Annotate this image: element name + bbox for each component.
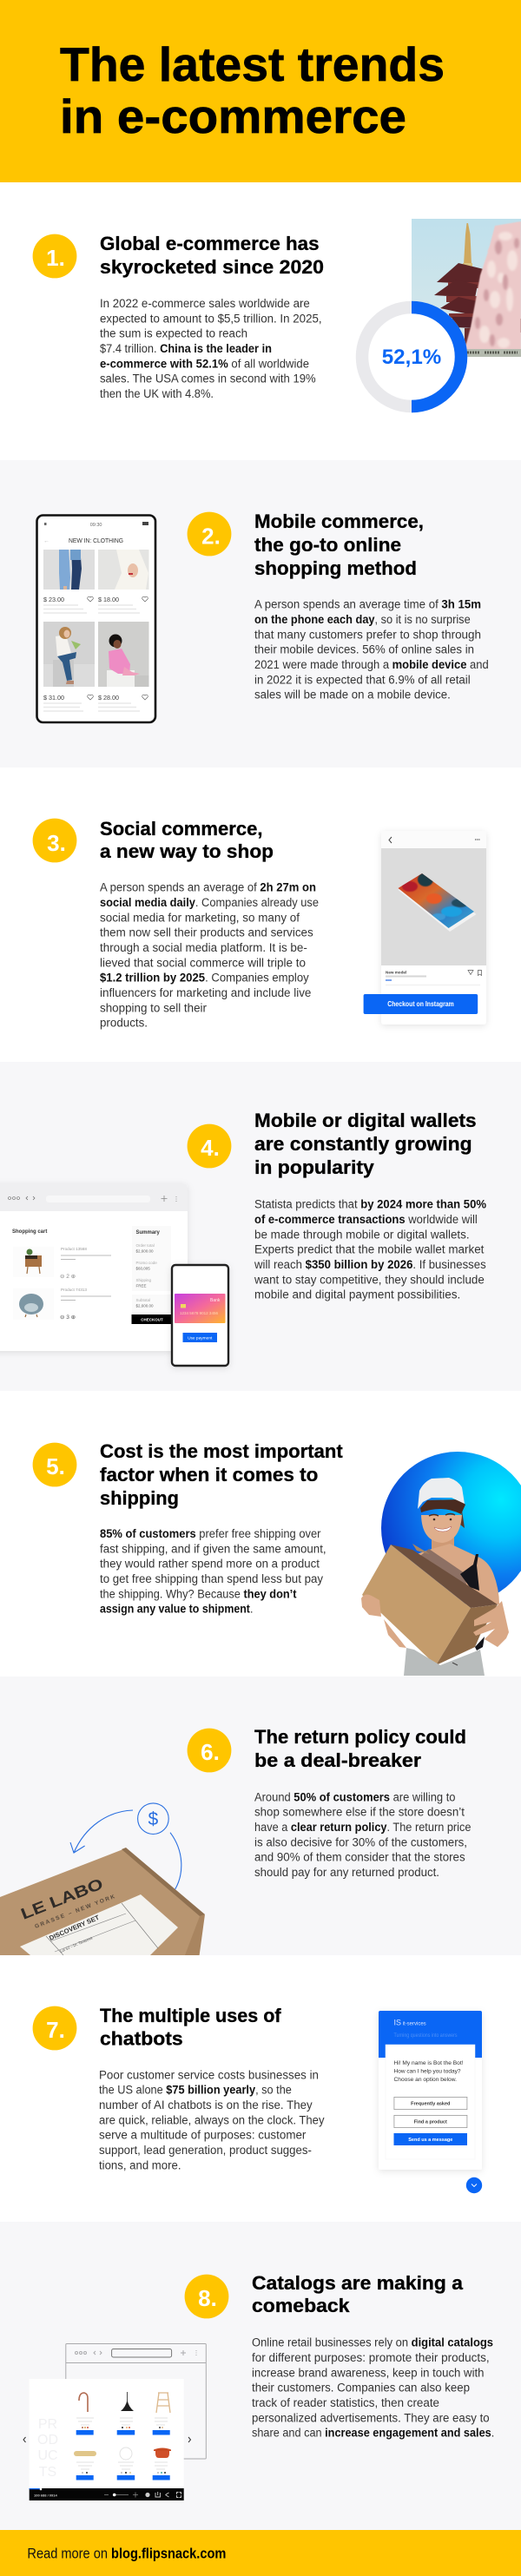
product photo: woman on cube <box>43 622 95 687</box>
badge 4 <box>188 1124 231 1168</box>
option buttons: Send us a message <box>408 2138 452 2143</box>
heading 1 <box>100 233 324 278</box>
body text 3: influencers for marketing and include live <box>100 986 311 999</box>
body text 4: will reach $350 billion by 2026. If businesses <box>254 1258 486 1271</box>
body text 4: Experts predict that the mobile wallet market <box>254 1243 485 1256</box>
donut chart 52,1% <box>362 307 461 406</box>
panel: section 3 social commerce <box>33 818 486 1030</box>
body text 8: track of reader statistics, then create <box>252 2396 439 2409</box>
heading 8: Catalogs are making a <box>252 2272 464 2294</box>
catalog products <box>74 2392 171 2460</box>
product details 1: ⊖ 2 ⊕ <box>60 1274 76 1280</box>
body text 1: then the UK with 4.8%. <box>100 387 214 400</box>
body text 4: want to stay competitive, they should include <box>254 1273 485 1286</box>
browser outline <box>66 2344 206 2459</box>
badge 7: 7. <box>46 2017 65 2043</box>
panel: section 5 shipping cost <box>33 1440 521 1676</box>
badge 3: 3. <box>47 830 66 856</box>
heading 6: be a deal-breaker <box>254 1749 421 1771</box>
refund cycle arrows and dollar icon: $ <box>148 1809 159 1829</box>
body text 8: share and can increase engagement and sales. <box>252 2427 494 2440</box>
badge 6: 6. <box>201 1739 220 1765</box>
chatbot widget: Turning questions into answers <box>394 2033 457 2039</box>
phone with payment card: Use payment <box>188 1335 213 1341</box>
heading 6 <box>254 1726 466 1771</box>
heading 3: a new way to shop <box>100 840 274 862</box>
ground strip <box>465 349 521 357</box>
product prices row 2 <box>43 694 148 711</box>
heading 4: Mobile or digital wallets <box>254 1110 477 1131</box>
scroll button <box>466 2177 482 2193</box>
order summary: Shipping <box>135 1278 152 1282</box>
body text 6: have a clear return policy. The return price <box>254 1821 471 1834</box>
body text 3: social media for marketing, so many of <box>100 911 300 924</box>
heading 7: The multiple uses of <box>100 2005 281 2026</box>
heading 1: skyrocketed since 2020 <box>100 256 324 278</box>
body text 8: increase brand awareness, keep in touch with <box>252 2366 485 2379</box>
body text 5: to get free shipping than spend less but pay <box>100 1572 323 1585</box>
body text 7: are quick, reliable, always on the clock. They <box>99 2113 325 2126</box>
phone mockup with clothing shop <box>36 516 155 722</box>
box brand text: GRASSE – NEW YORK <box>34 1894 115 1930</box>
heading 5: shipping <box>100 1487 179 1509</box>
body text 3: A person spends an average of 2h 27m on <box>100 881 316 894</box>
title <box>60 37 445 143</box>
body text 7: Poor customer service costs businesses in <box>99 2068 319 2081</box>
heading 2: Mobile commerce, <box>254 511 424 532</box>
photo: pagoda with cherry blossoms <box>412 219 521 357</box>
product photo: white hooded woman <box>98 550 149 590</box>
heading 2: shopping method <box>254 557 417 579</box>
catalog side title <box>37 2417 58 2480</box>
body text 4: of e-commerce transactions worldwide will <box>254 1213 478 1226</box>
body text 8: for different purposes: promote their products, <box>252 2351 490 2364</box>
box brand text: Lot 52 – Dr. Tarasova <box>59 1935 93 1953</box>
product photo: denim couple <box>43 547 95 590</box>
body text 3: through a social media platform. It is be- <box>100 941 307 954</box>
heading 7: chatbots <box>100 2028 183 2050</box>
catalog side title: PR <box>38 2417 57 2432</box>
body text 2 <box>254 598 489 702</box>
product: armchair <box>13 1288 54 1320</box>
body text 8: Online retail businesses rely on digital catalogs <box>252 2336 493 2349</box>
badge 2 <box>188 512 231 556</box>
body text 3 <box>100 881 319 1030</box>
body text 6: and 90% of them consider that the stores <box>254 1851 465 1864</box>
phone mockup with clothing shop: 09:30 <box>90 523 102 528</box>
top and jeans <box>404 1637 485 1676</box>
body text 4 <box>254 1198 486 1301</box>
donut chart 52,1%: 52,1% <box>382 346 441 369</box>
panel: section 1 global e-commerce <box>33 219 521 406</box>
body text 5 <box>100 1527 326 1616</box>
body text 5: they would rather spend more on a product <box>100 1558 320 1571</box>
product details 2: ⊖ 3 ⊕ <box>60 1314 76 1321</box>
heading 6: The return policy could <box>254 1726 466 1748</box>
body text 2: in 2022 it is expected that 6.9% of all retail <box>254 673 471 686</box>
product details 2: Product 74313 <box>61 1288 87 1292</box>
badge 5 <box>33 1443 76 1486</box>
order summary <box>132 1226 172 1324</box>
box brand text: LE LABO <box>18 1874 106 1923</box>
body text 6: is also decisive for 30% of the customers, <box>254 1835 467 1848</box>
panel: section 8 catalogs <box>0 2222 521 2530</box>
order summary: CHECKOUT <box>141 1318 163 1321</box>
browser shopping cart mockup: Shopping cart <box>12 1229 47 1235</box>
heading 4 <box>254 1110 477 1178</box>
phone with payment card <box>172 1265 228 1366</box>
body text 5: the shipping. Why? Because they don’t <box>100 1587 297 1600</box>
heading 2: the go-to online <box>254 534 401 556</box>
checkout button: Checkout on Instagram <box>387 999 454 1008</box>
body text 1: In 2022 e-commerce sales worldwide are <box>100 297 310 310</box>
body text 2: A person spends an average time of 3h 15m <box>254 598 481 611</box>
body text 3: them now sell their products and services <box>100 926 313 939</box>
catalog product captions <box>76 2418 168 2469</box>
body text 6: shop somewhere else if the store doesn’t <box>254 1806 465 1819</box>
body text 1: sales. The USA comes in second with 19% <box>100 372 316 385</box>
body text 4: mobile and digital payment possibilities. <box>254 1288 460 1301</box>
badge 1 <box>33 234 76 278</box>
body text 1: e-commerce with 52.1% of all worldwide <box>100 357 309 370</box>
order summary: Summary <box>135 1230 161 1235</box>
arms and hands <box>361 1595 509 1648</box>
body text 6 <box>254 1790 471 1879</box>
body text 6: should pay for any returned product. <box>254 1866 439 1879</box>
catalog toolbar <box>30 2488 184 2500</box>
catalog side title: UC <box>37 2448 58 2463</box>
body text 3: social media daily. Companies already use <box>100 896 319 909</box>
body text 2: that many customers prefer to shop through <box>254 628 481 641</box>
catalog side title: OD <box>37 2433 58 2448</box>
body text 6: Around 50% of customers are willing to <box>254 1790 455 1803</box>
body text 4: be made through mobile or digital wallets. <box>254 1228 470 1241</box>
catalog colour swatches <box>82 2427 166 2474</box>
body text 8: their customers. Companies can also keep <box>252 2382 470 2395</box>
box <box>362 1544 498 1665</box>
body text 1: the sum is expected to reach <box>100 327 247 340</box>
badge 5: 5. <box>46 1453 65 1479</box>
blossom tree <box>465 221 521 356</box>
social post mockup <box>364 831 486 1024</box>
panel: section 6 return policy <box>0 1728 471 1955</box>
refund cycle arrows and dollar icon <box>70 1803 181 1889</box>
product details 1 <box>60 1247 111 1280</box>
cap <box>418 1478 465 1509</box>
product prices row 1: $ 23.00 <box>43 596 64 603</box>
title: The latest trends <box>60 37 445 91</box>
box brand text: DISCOVERY SET <box>48 1914 101 1942</box>
bot greeting <box>394 2060 464 2083</box>
body text 1: expected to amount to $5,5 trillion. In 2025, <box>100 312 322 325</box>
phone mockup with clothing shop: NEW IN: CLOTHING <box>69 537 123 544</box>
order summary: $60,005 <box>135 1266 150 1271</box>
body text 7 <box>99 2068 325 2171</box>
photo: smiling woman holding box on blue circle <box>361 1452 521 1676</box>
body text 2: their mobile devices. 56% of online sales in <box>254 643 474 656</box>
product photo: woman in pink <box>98 622 149 687</box>
body text 2: on the phone each day, so it is no surprise <box>254 613 471 626</box>
body text 7: tions, and more. <box>99 2158 181 2171</box>
heading 7 <box>100 2005 281 2050</box>
body text 7: number of AI chatbots is on the rise. They <box>99 2098 313 2112</box>
panel: section 7 chatbots <box>33 2005 482 2193</box>
option buttons: Find a product <box>414 2120 447 2125</box>
rotated phone image <box>398 873 476 932</box>
body text 3: $1.2 trillion by 2025. Companies employ <box>100 972 309 985</box>
heading 4: in popularity <box>254 1156 375 1178</box>
catalog toolbar: 100 688 / 0914 <box>34 2494 57 2497</box>
order summary: Promo code <box>135 1261 157 1265</box>
badge 6 <box>188 1729 231 1772</box>
product prices row 1: $ 18.00 <box>98 596 119 603</box>
body text 5: assign any value to shipment. <box>100 1603 253 1616</box>
badge 7 <box>33 2006 76 2050</box>
order summary: $2,600.00 <box>135 1248 154 1254</box>
white product label <box>20 1894 178 1955</box>
heading 5: Cost is the most important <box>100 1440 343 1462</box>
heading 3 <box>100 818 274 862</box>
body text 1 <box>100 297 322 400</box>
footer banner <box>0 2530 521 2576</box>
box brand text <box>18 1874 115 1953</box>
heading 4: are constantly growing <box>254 1133 472 1155</box>
badge 8: 8. <box>198 2285 217 2311</box>
body text 3: lieved that social commerce will triple to <box>100 956 306 969</box>
product prices row 1 <box>43 596 148 613</box>
catalog viewer <box>30 2379 184 2500</box>
heading 5: factor when it comes to <box>100 1464 318 1486</box>
browser shopping cart mockup <box>0 1183 188 1351</box>
catalog buy buttons <box>76 2430 170 2480</box>
bot greeting: How can I help you today? <box>394 2068 461 2075</box>
body text 1: $7.4 trillion. China is the leader in <box>100 342 272 355</box>
product: nightstand <box>13 1247 54 1277</box>
product prices row 2: $ 31.00 <box>43 694 64 702</box>
badge 3 <box>33 819 76 862</box>
product details 1: Product 13568 <box>61 1247 87 1251</box>
body text 2: 2021 were made through a mobile device and <box>254 658 489 671</box>
catalog side title: TS <box>39 2465 56 2480</box>
badge 1: 1. <box>46 245 65 271</box>
badge 2: 2. <box>201 523 221 549</box>
phone with payment card: 1234 5678 9012 3456 <box>180 1311 219 1315</box>
phone mockup with clothing shop: ← <box>43 538 49 544</box>
heading 2 <box>254 511 424 579</box>
body text 5: fast shipping, and if given the same amount, <box>100 1542 326 1555</box>
footer banner: Read more on blog.flipsnack.com <box>27 2546 226 2562</box>
photo: Le Labo cardboard box <box>0 1848 205 1955</box>
body text 7: support, lead generation, product sugges- <box>99 2144 312 2157</box>
header banner <box>0 0 521 182</box>
body text 8: personalized advertisements. They are easy to <box>252 2411 490 2424</box>
social post mockup: New model <box>386 971 406 974</box>
order summary: FREE <box>135 1283 147 1288</box>
badge 4: 4. <box>201 1135 220 1161</box>
catalog navigation arrows <box>23 2437 191 2442</box>
face <box>420 1499 465 1543</box>
panel: section 2 mobile commerce <box>36 512 488 724</box>
body text 7: the US alone $75 billion yearly, so the <box>99 2084 292 2097</box>
bot greeting: Hi! My name is Bot the Bot! <box>394 2060 464 2066</box>
product prices row 2: $ 28.00 <box>98 694 119 702</box>
neck and shoulders <box>417 1532 499 1604</box>
heading 8 <box>252 2272 464 2316</box>
option buttons <box>394 2097 467 2145</box>
body text 3: shopping to sell their <box>100 1001 208 1014</box>
body text 3: products. <box>100 1017 148 1030</box>
order summary: $2,600.00 <box>135 1304 154 1308</box>
body text 2: sales will be made on a mobile device. <box>254 688 451 702</box>
product details 2 <box>60 1288 111 1321</box>
heading 5 <box>100 1440 343 1509</box>
title: in e-commerce <box>60 89 406 143</box>
chatbot widget: IS it-services <box>394 2018 426 2026</box>
body text 8 <box>252 2336 494 2440</box>
body text 4: Statista predicts that by 2024 more than 50% <box>254 1198 486 1211</box>
checkout button <box>364 994 478 1014</box>
badge 8 <box>185 2275 228 2318</box>
option buttons: Frequently asked <box>411 2101 450 2106</box>
chatbot widget <box>379 2011 482 2193</box>
heading 8: comeback <box>252 2295 350 2316</box>
order summary: Order total <box>135 1243 155 1248</box>
body text 7: serve a multitude of purposes: customer <box>99 2129 307 2142</box>
phone with payment card: Bank <box>210 1298 221 1303</box>
order summary: Subtotal <box>135 1298 150 1302</box>
bot greeting: Choose an option below. <box>394 2077 457 2083</box>
panel: section 4 digital wallets <box>0 1062 521 1391</box>
heading 3: Social commerce, <box>100 818 262 840</box>
heading 1: Global e-commerce has <box>100 233 320 254</box>
body text 5: 85% of customers prefer free shipping over <box>100 1527 321 1540</box>
